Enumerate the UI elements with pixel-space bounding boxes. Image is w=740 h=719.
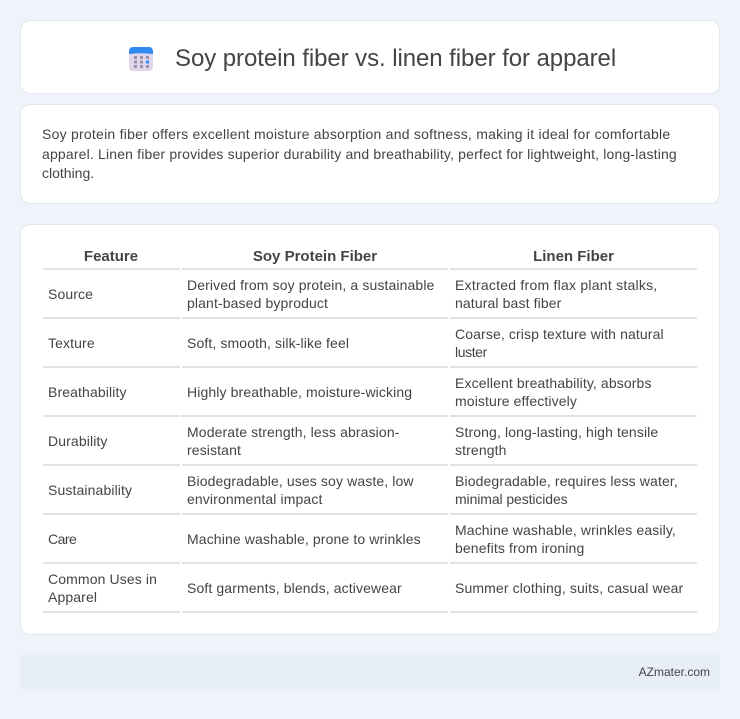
table: comparison: Soft, smooth, silk-like feel [187,335,349,351]
table: comparison: Derived from soy protein, a sustainable [187,277,434,293]
footer credit: AZmater.com [639,665,710,679]
row: Source: Source [48,286,93,302]
intro text [42,126,677,181]
table: comparison: moisture effectively [455,393,577,409]
title: Soy protein fiber vs. linen fiber for apparel [175,45,616,72]
row: Care: Care [48,531,76,547]
table: comparison: Soft garments, blends, activewear [187,580,402,596]
table: comparison: Excellent breathability, absorbs [455,375,652,391]
panel: comparison table card [20,224,720,635]
table: comparison: Strong, long-lasting, high tensile [455,424,658,440]
table: comparison: benefits from ironing [455,540,584,556]
table: comparison: Moderate strength, less abrasion- [187,424,400,440]
intro text: Soy protein fiber offers excellent moisture absorption and softness, making it ideal for comfortable [42,126,670,142]
table: comparison: Summer clothing, suits, casual wear [455,580,683,596]
header: Linen Fiber: Linen Fiber [533,248,614,265]
table: comparison: environmental impact [187,491,322,507]
row: Common Uses in Apparel [48,571,157,605]
table: comparison: Highly breathable, moisture-wicking [187,384,412,400]
table: comparison: Machine washable, prone to wrinkles [187,531,421,547]
intro text: clothing. [42,165,94,181]
row: Durability: Durability [48,433,108,449]
row: Sustainability: Sustainability [48,482,132,498]
table: comparison: minimal pesticides [455,491,568,507]
row: Common Uses in Apparel: Common Uses in [48,571,157,587]
table: comparison: strength [455,442,507,458]
intro text: apparel. Linen fiber provides superior durability and breathability, perfect for lightweight, long-lasting [42,146,677,162]
table: comparison: Machine washable, wrinkles easily, [455,522,676,538]
table: comparison: plant-based byproduct [187,295,328,311]
table: comparison: Biodegradable, requires less water, [455,473,678,489]
table: comparison: Extracted from flax plant stalks, [455,277,657,293]
row: Common Uses in Apparel: Apparel [48,589,97,605]
table: comparison: Biodegradable, uses soy waste, low [187,473,414,489]
header: Soy Protein Fiber: Soy Protein Fiber [253,248,377,265]
row: Texture: Texture [48,335,95,351]
panel: title card [20,20,720,94]
table: comparison: Coarse, crisp texture with natural [455,326,664,342]
table: comparison: natural bast fiber [455,295,561,311]
icon: calendar [129,47,153,71]
footer bar [20,655,720,689]
table: comparison: resistant [187,442,241,458]
table: comparison: luster [455,344,487,360]
header: Feature: Feature [84,248,138,265]
row: Breathability: Breathability [48,384,127,400]
panel: intro text card [20,104,720,204]
